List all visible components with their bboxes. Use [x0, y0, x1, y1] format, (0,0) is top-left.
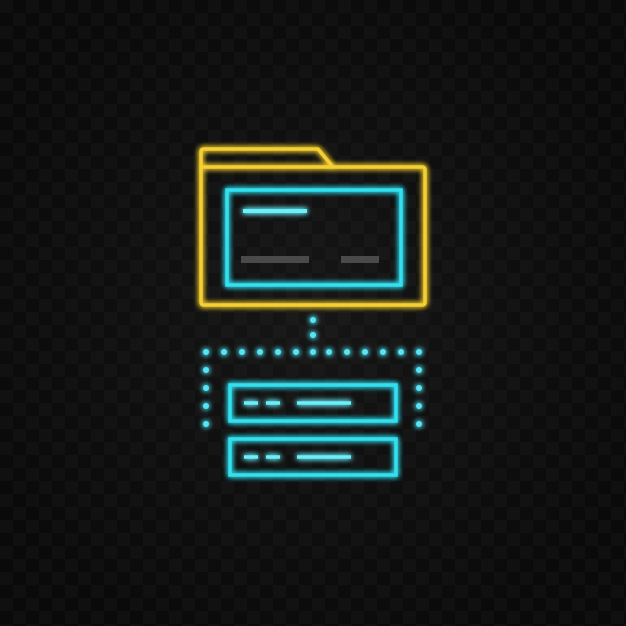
dotted connector: [203, 317, 422, 427]
gray placeholder bars: [241, 256, 379, 263]
document card inside folder: [227, 190, 401, 285]
icon: folder: [201, 149, 425, 305]
list item 2: [230, 439, 396, 475]
list item 1: [230, 385, 396, 421]
